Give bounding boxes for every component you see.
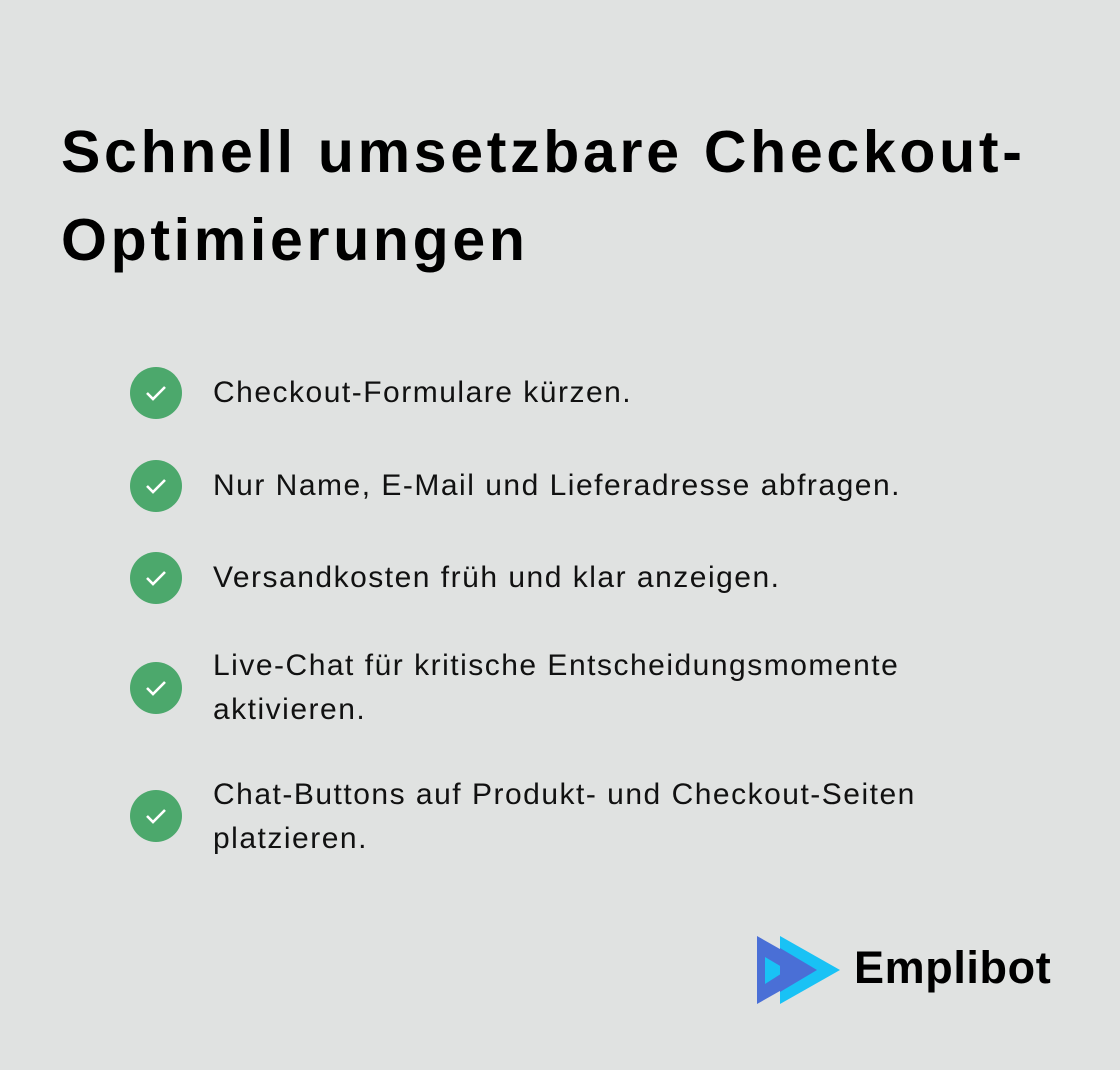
- icon: logo triangles: [757, 936, 840, 1004]
- text 2: Nur Name, E-Mail und Lieferadresse abfragen.: [213, 469, 901, 502]
- text 5: [213, 778, 916, 855]
- logo: [757, 936, 1051, 1004]
- title: Optimierungen: [61, 207, 529, 273]
- text 4: aktivieren.: [213, 693, 366, 726]
- text 5: platzieren.: [213, 822, 368, 855]
- text 1: Checkout-Formulare kürzen.: [213, 376, 632, 409]
- item 5: [130, 778, 916, 855]
- icon: check: [130, 460, 182, 512]
- item 2: [130, 460, 901, 512]
- title: [61, 119, 1026, 273]
- item 3: [130, 552, 781, 604]
- text 3: Versandkosten früh und klar anzeigen.: [213, 561, 781, 594]
- icon: check: [130, 790, 182, 842]
- text 5: Chat-Buttons auf Produkt- und Checkout-Seiten: [213, 778, 916, 811]
- icon: check: [130, 367, 182, 419]
- logo text: Emplibot: [854, 942, 1051, 993]
- title: Schnell umsetzbare Checkout-: [61, 119, 1026, 185]
- icon: check: [130, 662, 182, 714]
- text 4: [213, 649, 899, 726]
- item 4: [130, 649, 899, 726]
- icon: check: [130, 552, 182, 604]
- item 1: [130, 367, 632, 419]
- text 4: Live-Chat für kritische Entscheidungsmomente: [213, 649, 899, 682]
